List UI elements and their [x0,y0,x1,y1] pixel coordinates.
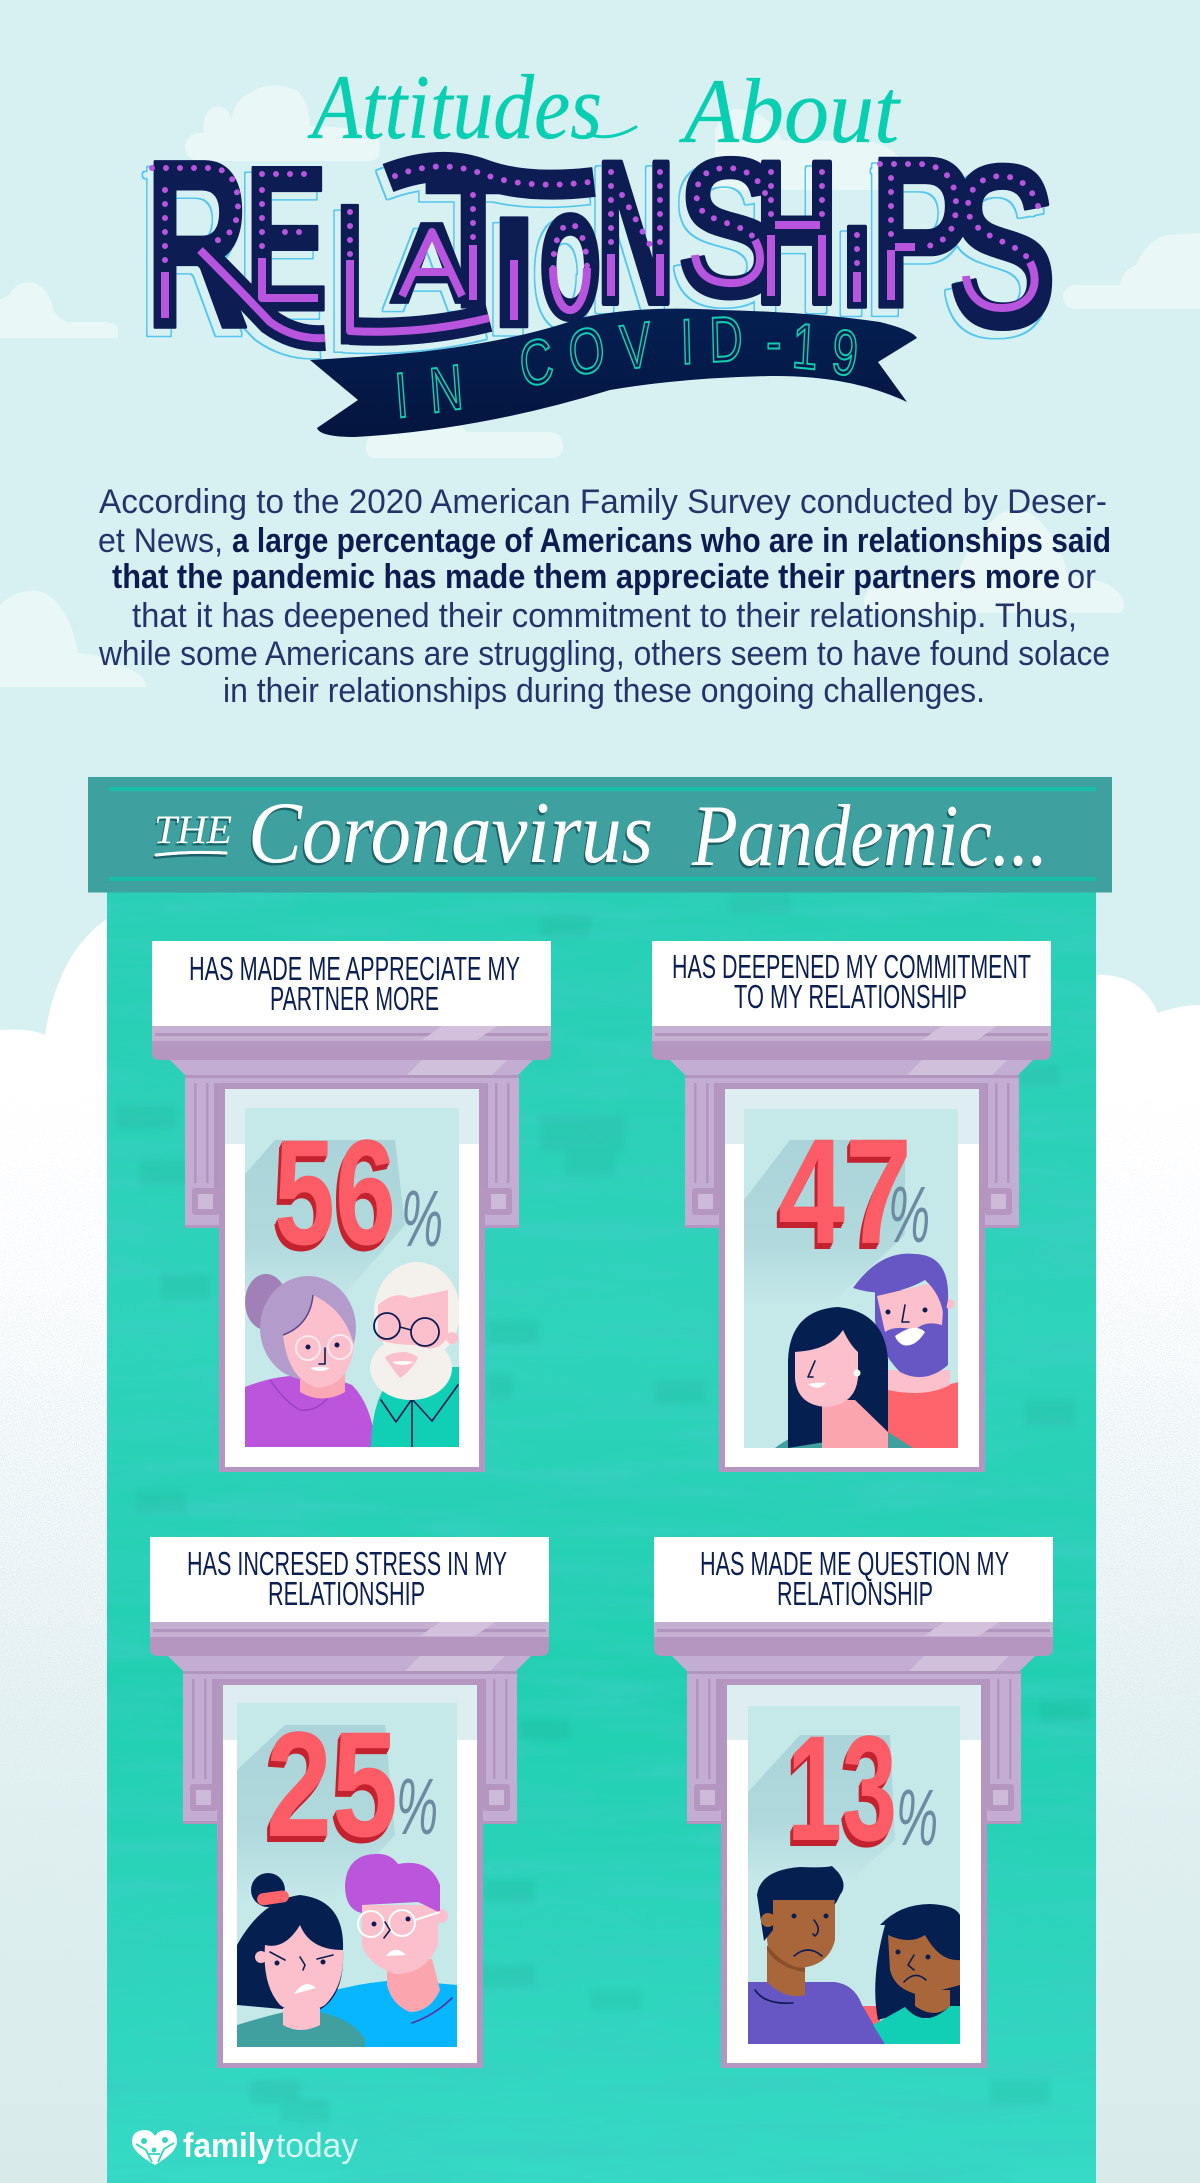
large lower cloud [0,917,1200,2183]
logo: family today: family [183,2127,274,2165]
card 2: deepened commitment 47% [652,941,1051,1472]
number 25 percent: 25 [266,1700,398,1868]
banner: The Coronavirus Pandemic [88,777,1112,892]
title: Attitudes About: About [678,60,901,162]
banner heading text: Pandemic... [691,788,1048,885]
illustration: smiling couple [775,1254,958,1448]
logo: family today [132,2127,358,2165]
ribbon: In COVID-19: IN COVID-19 [392,303,861,432]
number 47 percent: 47 [778,1107,912,1275]
card 4 label: RELATIONSHIP [777,1575,933,1612]
title: Attitudes About: Attitudes [307,56,602,158]
intro paragraph: in their relationships during these ongoing challenges. [223,672,985,710]
title: RELATIONSHIPS: N [596,119,675,347]
illustration: older couple [245,1262,460,1447]
intro paragraph: or [1067,558,1096,596]
card 3 picture background [237,1703,457,2047]
intro paragraph: et News, [98,522,223,560]
intro paragraph: while some Americans are struggling, others seem to have found solace [98,635,1110,673]
card 4 label: HAS MADE ME QUESTION MY [700,1545,1009,1582]
title: RELATIONSHIPS: I [489,183,539,361]
card 1: appreciate partner 56% [152,941,551,1472]
card 1 label: PARTNER MORE [270,980,439,1017]
intro paragraph [98,483,1111,710]
number 56 percent: % [401,1174,443,1263]
banner heading text: THE [154,807,232,852]
intro paragraph: According to the 2020 American Family Survey conducted by Deser- [99,483,1107,521]
card 1 label [189,950,520,1017]
title: RELATIONSHIPS: E [244,124,329,355]
title: RELATIONSHIPS: A [387,199,477,328]
number 13 percent: 13 [787,1704,897,1872]
title: RELATIONSHIPS: R [145,110,249,378]
banner heading text [154,785,1048,885]
banner heading text: Coronavirus [248,785,653,882]
title: RELATIONSHIPS: H [755,119,838,347]
title: Attitudes About [307,56,901,162]
title: RELATIONSHIPS: T [425,128,522,349]
title: RELATIONSHIPS: O [540,186,601,348]
number 56 percent: 56 [274,1108,396,1276]
title: RELATIONSHIPS [145,110,1057,386]
card 3 label [187,1545,507,1612]
title: RELATIONSHIPS: I [841,201,873,332]
title: RELATIONSHIPS: S [677,117,784,340]
card 2 picture background [744,1109,958,1448]
card 4: question relationship 13% [654,1537,1053,2068]
card 1 label: HAS MADE ME APPRECIATE MY [189,950,520,987]
icon: heart with family [132,2130,177,2165]
card 2 label [672,948,1031,1015]
card 2 label: TO MY RELATIONSHIP [734,978,967,1015]
card 3 label: RELATIONSHIP [268,1575,425,1612]
card 1 picture background [245,1108,459,1447]
illustration: stressed couple [237,1854,457,2047]
card 3: increased stress 25% [150,1537,549,2068]
intro paragraph: that it has deepened their commitment to their relationship. Thus, [132,597,1077,635]
card 4 label [700,1545,1009,1612]
title: RELATIONSHIPS: L [334,164,404,386]
card 4 picture background [748,1706,960,2044]
illustration: doubtful couple [748,1866,960,2044]
number 13 percent: % [896,1773,938,1862]
intro paragraph: that the pandemic has made them appreciate their partners more [112,558,1060,596]
title: RELATIONSHIPS: S [948,117,1057,377]
teal main panel [107,890,1096,2183]
number 47 percent: % [888,1170,930,1259]
number 25 percent: % [396,1762,438,1851]
logo: family today: today [276,2127,358,2165]
clouds behind title and intro [0,85,1200,687]
speckled cloud texture [0,1154,1200,1742]
title: RELATIONSHIPS: P [869,113,974,354]
card 3 label: HAS INCRESED STRESS IN MY [187,1545,507,1582]
